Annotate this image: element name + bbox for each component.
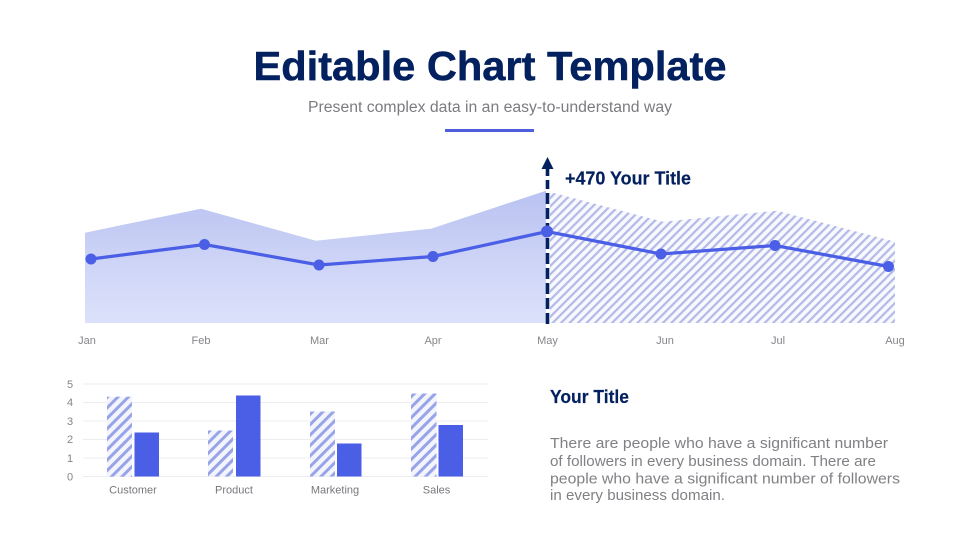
hatched bars	[107, 394, 436, 477]
y axis labels: 4	[67, 397, 73, 409]
subtitle: Present complex data in an easy-to-understand way	[308, 99, 672, 116]
x axis labels: Feb	[192, 335, 210, 347]
y axis labels: 5	[67, 379, 73, 391]
x axis labels: Jul	[771, 335, 785, 347]
y axis labels	[67, 379, 73, 484]
title: Editable Chart Template	[254, 43, 726, 89]
text block body	[550, 435, 900, 504]
category labels: Product	[215, 484, 253, 496]
x axis labels	[78, 335, 905, 347]
category labels	[109, 484, 451, 496]
category labels: Marketing	[311, 484, 359, 496]
y axis labels: 3	[67, 416, 73, 428]
y axis labels: 2	[67, 434, 73, 446]
text block body: people who have a significant number of followers	[550, 470, 900, 488]
solid area: Jan to May	[85, 191, 546, 323]
text block body: of followers in every business domain. There are	[550, 453, 876, 470]
bar chart	[67, 379, 488, 496]
category labels: Customer	[109, 484, 157, 496]
data points	[86, 239, 894, 272]
x axis labels: Mar	[310, 335, 329, 347]
x axis labels: Jun	[656, 335, 674, 347]
arrow: May marker	[542, 157, 554, 324]
y axis labels: 1	[67, 453, 73, 465]
May data point	[541, 226, 553, 238]
text block body: There are people who have a significant number	[550, 435, 888, 452]
grid lines	[83, 384, 488, 476]
x axis labels: Jan	[78, 335, 96, 347]
x axis labels: Apr	[424, 335, 442, 347]
y axis labels: 0	[67, 472, 73, 484]
solid bars	[134, 396, 463, 476]
hatched area: May to Aug	[550, 192, 895, 323]
x axis labels: May	[537, 335, 558, 347]
x axis labels: Aug	[885, 335, 905, 347]
area line chart	[78, 157, 905, 347]
text block body: in every business domain.	[550, 487, 725, 504]
category labels: Sales	[423, 484, 451, 496]
text block heading: Your Title	[550, 386, 629, 407]
trend line	[91, 232, 888, 266]
callout: +470: +470 Your Title	[565, 168, 691, 188]
title divider	[445, 129, 534, 132]
